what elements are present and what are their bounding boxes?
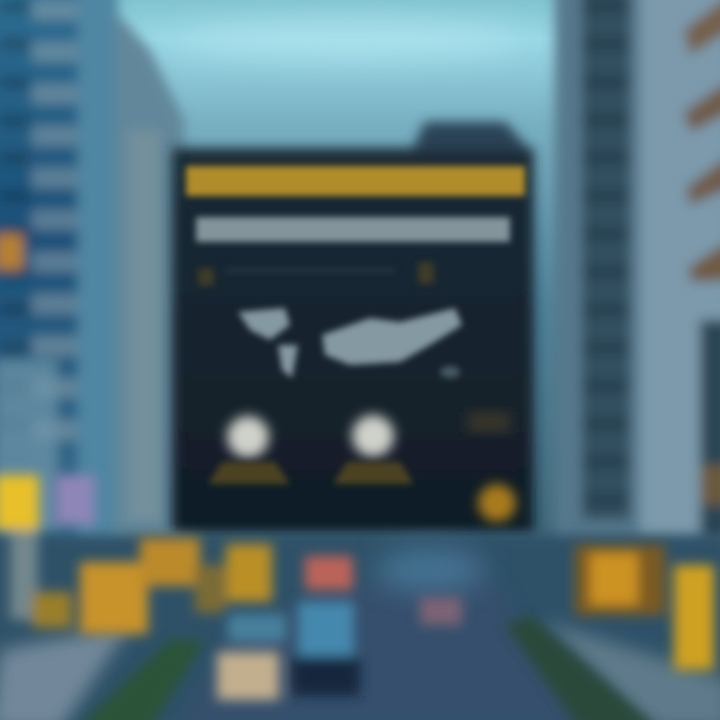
side text mark [468, 412, 510, 432]
subheading bar [196, 217, 510, 242]
yellow badge [478, 484, 516, 522]
vehicles [217, 556, 462, 700]
icon: left circle [227, 416, 269, 458]
left buildings [0, 0, 184, 550]
panel: billboard [172, 122, 534, 533]
small gold marks [198, 262, 434, 286]
world map [238, 308, 462, 378]
shops: right [575, 545, 714, 670]
right label [333, 462, 414, 484]
sky [0, 0, 720, 560]
billboard body [172, 122, 534, 533]
icon: right circle [352, 415, 394, 457]
right buildings [555, 0, 720, 550]
left label [208, 462, 290, 484]
shops: left [0, 475, 272, 634]
street [0, 535, 720, 720]
heading bar [186, 166, 525, 196]
